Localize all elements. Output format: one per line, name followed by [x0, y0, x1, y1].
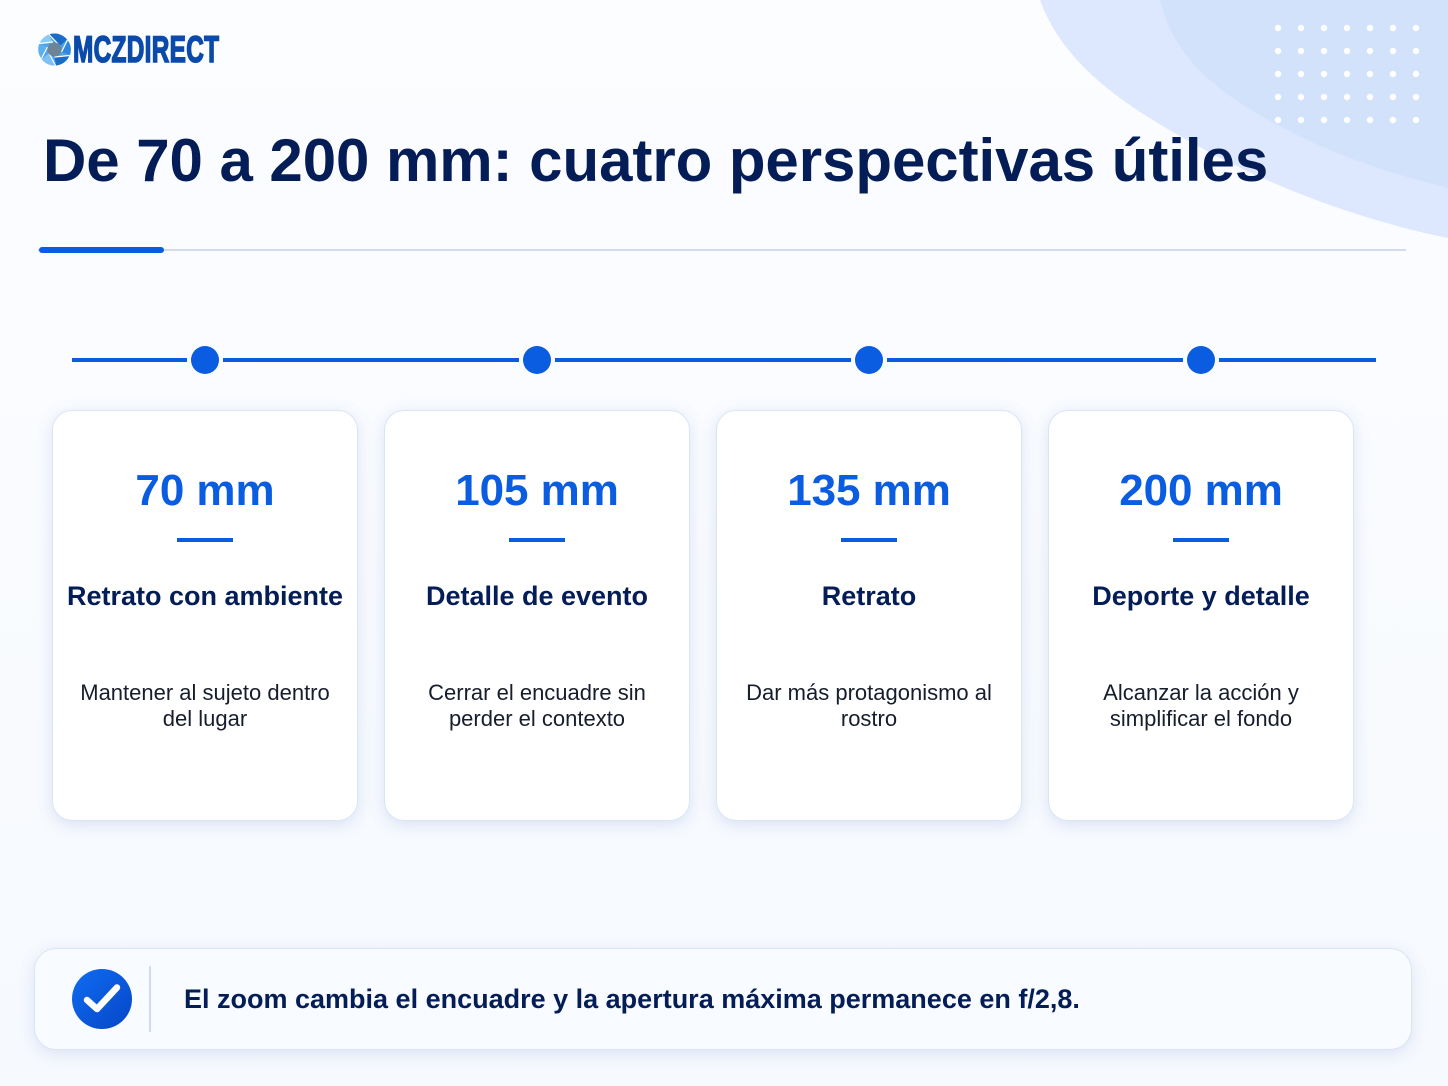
- description: [746, 680, 992, 731]
- timeline: [72, 346, 1376, 374]
- focal length: 200 mm: [1119, 466, 1283, 515]
- logo wordmark: MCZDIRECT: [73, 29, 219, 70]
- description: [80, 680, 330, 731]
- description: rostro: [841, 706, 897, 731]
- description: Mantener al sujeto dentro: [80, 680, 330, 705]
- use heading: Deporte y detalle: [1092, 581, 1310, 611]
- use heading: Retrato: [822, 581, 916, 611]
- description: simplificar el fondo: [1110, 706, 1292, 731]
- panel: 200 mm: [1048, 410, 1354, 820]
- panel: 105 mm: [384, 410, 690, 820]
- callout: [34, 948, 1412, 1050]
- description: del lugar: [163, 706, 247, 731]
- focal length: 105 mm: [455, 466, 619, 515]
- description: [428, 680, 646, 731]
- description: Alcanzar la acción y: [1103, 680, 1299, 705]
- focal length: 135 mm: [787, 466, 951, 515]
- icon: check: [72, 969, 132, 1029]
- use heading: Detalle de evento: [426, 581, 648, 611]
- use heading: Retrato con ambiente: [67, 581, 343, 611]
- background curved shapes: [1040, 0, 1448, 238]
- callout text: El zoom cambia el encuadre y la apertura máxima permanece en f/2,8.: [184, 984, 1080, 1014]
- title: De 70 a 200 mm: cuatro perspectivas útiles: [43, 126, 1268, 194]
- logo: [38, 29, 220, 70]
- panel: 135 mm: [716, 410, 1022, 820]
- description: perder el contexto: [449, 706, 625, 731]
- icon: camera aperture: [38, 34, 71, 66]
- description: [1103, 680, 1299, 731]
- panel: 70 mm: [52, 410, 358, 820]
- description: Cerrar el encuadre sin: [428, 680, 646, 705]
- title divider: [38, 247, 1406, 253]
- description: Dar más protagonismo al: [746, 680, 992, 705]
- focal length: 70 mm: [135, 466, 275, 515]
